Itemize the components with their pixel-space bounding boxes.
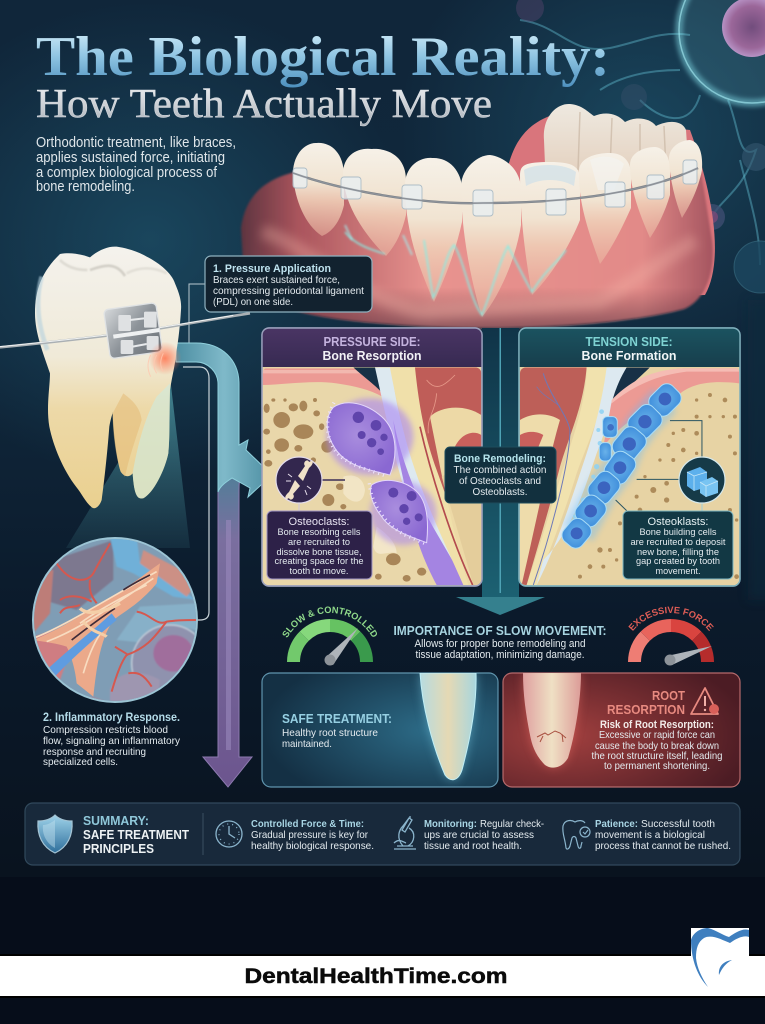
panel: root resorption: to permanent shortening. — [604, 760, 710, 772]
illustration: teeth with braces — [241, 104, 715, 328]
panel: summary: ups are crucial to assess — [424, 829, 534, 841]
osteoblast cell chain — [558, 380, 685, 552]
icon: bone blocks — [679, 457, 725, 511]
lateral — [579, 153, 631, 264]
callout: bone remodeling: of Osteoclasts and — [459, 475, 541, 487]
incisor 2 — [520, 162, 580, 295]
panel: summary: Patience: — [595, 818, 638, 830]
molar 1 — [293, 143, 344, 236]
text: inflammatory response — [43, 712, 181, 768]
intro text: bone remodeling. — [36, 179, 135, 195]
premolar — [343, 149, 406, 256]
text: inflammatory response: specialized cells. — [43, 756, 118, 768]
text: inflammatory response: Compression restricts blood — [43, 724, 168, 736]
panel: root resorption: Risk of Root Resorption: — [600, 719, 714, 731]
panel: root resorption: ROOT — [652, 689, 685, 703]
panel: root resorption — [503, 673, 740, 787]
panel: summary — [25, 803, 740, 865]
panel: summary: Controlled Force & Time: — [251, 818, 364, 830]
panel: tension side — [519, 328, 740, 586]
canine — [405, 158, 462, 302]
osteoclast cell 1 — [327, 398, 413, 477]
callout: osteoclasts: dissolve bone tissue, — [276, 547, 362, 558]
panel: root resorption: RESORPTION — [607, 703, 685, 717]
panel: summary: healthy biological response. — [251, 840, 374, 852]
panel: safe treatment: Healthy root structure — [282, 727, 378, 739]
panel header: bone formation: Bone Formation — [582, 349, 676, 363]
panel: summary: Monitoring: — [424, 818, 477, 830]
panel: summary: SUMMARY: — [83, 813, 149, 828]
icon: broken bone — [276, 457, 345, 511]
center connector arrow — [456, 328, 545, 615]
panel: safe treatment: SAFE TREATMENT: — [282, 712, 392, 726]
callout: osteoclasts: Osteoclasts: — [288, 516, 350, 528]
panel: root resorption: Excessive or rapid force can — [599, 729, 715, 741]
callout: osteoclasts: creating space for the — [274, 556, 364, 567]
icon: warning — [691, 688, 719, 714]
heading: importance of slow movement: Allows for proper bone remodeling and — [414, 638, 586, 650]
panel header: bone formation: TENSION SIDE: — [586, 335, 672, 349]
panel header: bone formation — [519, 328, 740, 367]
intro text: a complex biological process of — [36, 165, 218, 181]
gauge: slow and controlled: SLOW & CONTROLLED — [282, 606, 377, 638]
heading: importance of slow movement — [394, 623, 606, 661]
icon: clock — [216, 821, 242, 847]
title: The Biological Reality: — [36, 26, 610, 88]
title — [36, 26, 610, 126]
callout: bone remodeling: The combined action — [454, 464, 547, 476]
callout: osteoclasts — [267, 511, 372, 579]
panel: summary: process that cannot be rushed. — [595, 840, 731, 852]
bone resorption illustration — [263, 367, 481, 585]
callout: osteoblasts: new bone, filling the — [637, 547, 719, 558]
neuron cells decoration — [516, 0, 765, 293]
panel header: bone resorption — [262, 328, 482, 367]
icon: microscope — [394, 816, 416, 849]
intro text — [36, 135, 236, 195]
panel: summary: Gradual pressure is key for — [251, 829, 368, 841]
callout: pressure application: Braces exert sustained force, — [213, 274, 340, 286]
panel header: bone resorption: PRESSURE SIDE: — [324, 335, 420, 349]
callout: pressure application — [177, 256, 372, 349]
panel header: bone resorption: Bone Resorption — [322, 349, 422, 363]
callout: osteoclasts: tooth to move. — [290, 566, 348, 577]
text: inflammatory response: 2. Inflammatory Response. — [43, 712, 180, 724]
healthy root — [420, 673, 476, 780]
callout: pressure application: (PDL) on one side. — [213, 296, 293, 308]
icon: tooth with check — [563, 821, 590, 849]
callout: osteoblasts: are recruited to deposit — [630, 537, 726, 548]
osteoclast cell 2 — [369, 480, 437, 545]
gauge: slow and controlled — [282, 606, 377, 666]
callout: osteoblasts: movement. — [656, 566, 700, 577]
panel: summary: Regular check- — [480, 818, 544, 830]
panel: root resorption: the root structure itself, leading — [592, 750, 723, 762]
logo — [691, 928, 749, 987]
footer band: DentalHealthTime.com — [244, 965, 508, 988]
damaged root — [523, 673, 581, 768]
callout: osteoblasts: Osteoklasts: — [648, 516, 708, 528]
icon: shield — [38, 815, 72, 853]
bone formation illustration — [520, 367, 739, 585]
gauge: excessive force: EXCESSIVE FORCE — [628, 606, 714, 632]
intro text: Orthodontic treatment, like braces, — [36, 135, 236, 151]
panel: summary: PRINCIPLES — [83, 841, 154, 856]
illustration: magnified periodontal ligament — [32, 537, 198, 703]
panel: safe treatment: maintained. — [282, 738, 332, 750]
callout: osteoblasts: Bone building cells — [640, 527, 717, 538]
heading: importance of slow movement: IMPORTANCE OF SLOW MOVEMENT: — [394, 623, 606, 638]
illustration: tooth with bracket — [0, 247, 250, 548]
callout: bone remodeling: Bone Remodeling: — [454, 453, 546, 465]
panel: summary: Successful tooth — [641, 818, 715, 830]
incisor — [461, 155, 521, 317]
panel: root resorption: cause the body to break down — [595, 740, 719, 752]
footer band — [0, 954, 765, 998]
gauge: excessive force — [628, 606, 714, 666]
panel: summary: movement is a biological — [595, 829, 705, 841]
flow arrows — [176, 343, 272, 787]
callout: bone remodeling — [445, 447, 556, 503]
title: How Teeth Actually Move — [36, 80, 492, 126]
text: inflammatory response: flow, signaling an inflammatory — [43, 735, 181, 747]
heading: importance of slow movement: tissue adaptation, minimizing damage. — [416, 649, 584, 661]
callout: pressure application: compressing periodontal ligament — [213, 285, 364, 297]
callout: osteoclasts: are recruited to — [288, 537, 350, 548]
callout: osteoblasts — [623, 511, 733, 579]
panel: safe treatment — [262, 673, 498, 787]
text: inflammatory response: response and recruiting — [43, 746, 146, 758]
panel: summary: tissue and root health. — [424, 840, 522, 852]
callout: pressure application: 1. Pressure Application — [213, 263, 331, 275]
intro text: applies sustained force, initiating — [36, 150, 225, 166]
panel: pressure side — [262, 328, 482, 586]
callout: osteoclasts: Bone resorbing cells — [278, 527, 361, 538]
callout: bone remodeling: Osteoblasts. — [472, 486, 528, 498]
panel: summary: SAFE TREATMENT — [83, 827, 189, 842]
callout: osteoblasts: gap created by tooth — [636, 556, 720, 567]
